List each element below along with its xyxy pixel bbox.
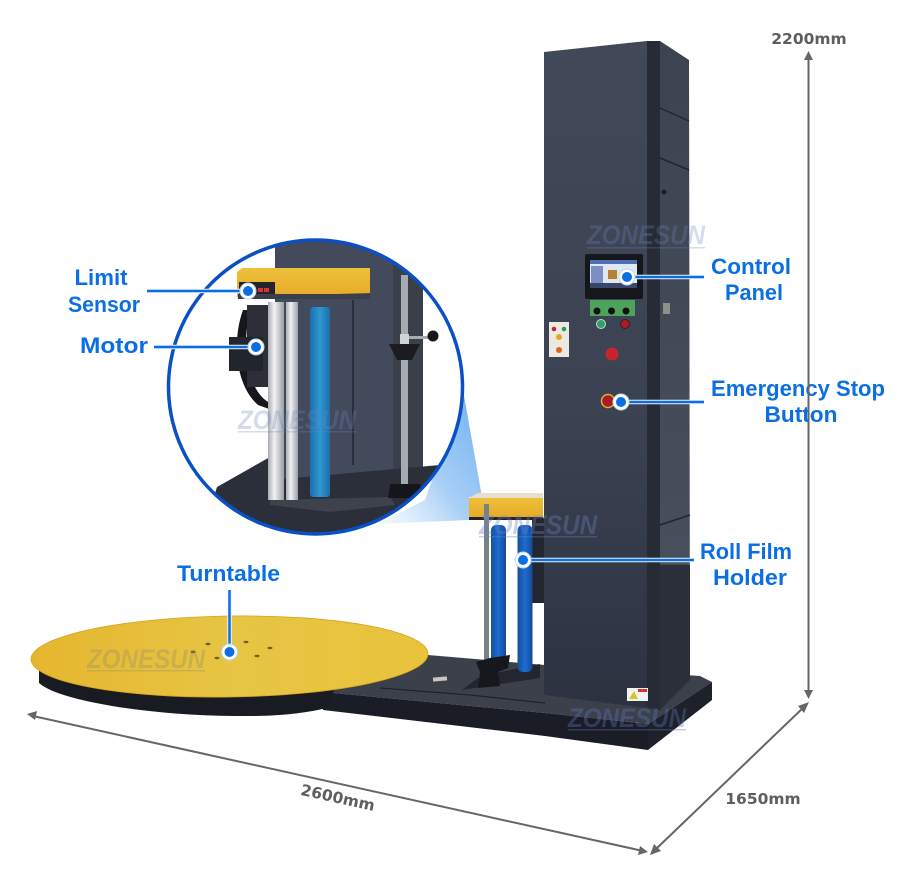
leader: Emergency Stop bbox=[613, 394, 704, 410]
label: Motor: Motor bbox=[80, 333, 148, 358]
warning sticker bbox=[627, 688, 648, 701]
inset zoom circle bbox=[168, 235, 462, 540]
leader: Turntable bbox=[222, 590, 238, 660]
label: Control Panel bbox=[711, 254, 791, 305]
roll film carriage bbox=[462, 493, 545, 690]
label: Roll Film Holder: Roll Film bbox=[700, 539, 792, 564]
label: Turntable: Turntable bbox=[177, 561, 280, 586]
dimension text: 2600mm: 2600mm bbox=[299, 781, 377, 815]
watermark: base: ZONESUN bbox=[567, 703, 686, 733]
dimension arrow: height bbox=[804, 51, 813, 699]
leader: Roll Film Holder bbox=[515, 552, 694, 568]
label: Control Panel: Control bbox=[711, 254, 791, 279]
label: Limit Sensor: Sensor bbox=[68, 292, 140, 317]
label: Emergency Stop Button bbox=[711, 376, 885, 427]
zoom wedge bbox=[378, 390, 482, 524]
dimension arrow: width bbox=[27, 711, 648, 855]
label: Control Panel: Panel bbox=[725, 280, 783, 305]
label: Emergency Stop Button: Emergency Stop bbox=[711, 376, 885, 401]
dimension text: 1650mm: 1650mm bbox=[725, 790, 801, 808]
tower bbox=[544, 41, 690, 710]
turntable bbox=[30, 613, 429, 716]
label: Limit Sensor bbox=[68, 265, 140, 317]
watermark: top right: ZONESUN bbox=[586, 220, 705, 250]
control panel hardware bbox=[549, 254, 643, 408]
watermark: turntable: ZONESUN bbox=[86, 644, 205, 674]
label: Limit Sensor: Limit bbox=[74, 265, 128, 290]
label: Roll Film Holder: Holder bbox=[713, 565, 787, 590]
label: Roll Film Holder bbox=[700, 539, 792, 590]
dimension text: 2200mm: 2200mm bbox=[771, 30, 847, 48]
watermark: inset: ZONESUN bbox=[237, 405, 356, 435]
machine base plate bbox=[323, 655, 712, 750]
label: Emergency Stop Button: Button bbox=[764, 402, 838, 427]
leader: Limit Sensor bbox=[147, 283, 256, 299]
watermark: carriage: ZONESUN bbox=[478, 510, 597, 540]
leader: Control Panel bbox=[619, 269, 704, 285]
dimension arrow: depth bbox=[650, 702, 809, 855]
leader: Motor bbox=[154, 339, 264, 355]
